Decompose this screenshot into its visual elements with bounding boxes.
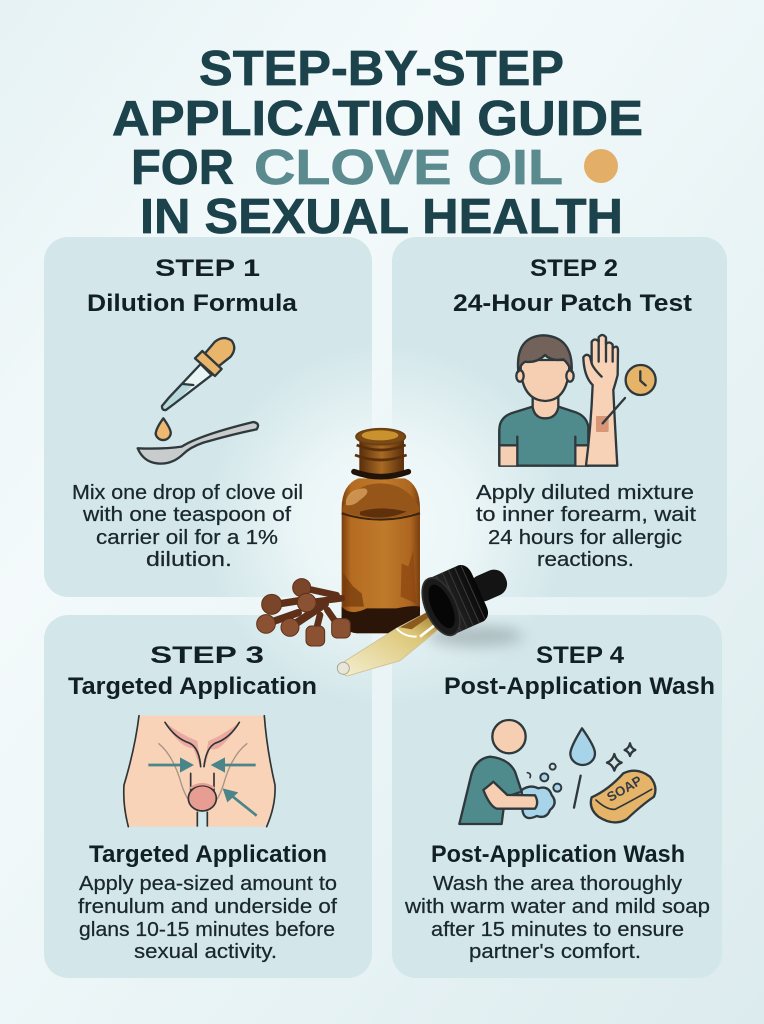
bottle xyxy=(257,429,518,676)
step 3 heading: STEP 3 xyxy=(150,642,264,669)
dropper pipette xyxy=(337,612,440,676)
step 3 title: Targeted Application xyxy=(68,673,317,700)
step 3 text: Apply pea-sized amount to xyxy=(79,872,337,895)
icon: patch test xyxy=(499,335,656,466)
dropper cap xyxy=(415,550,518,641)
arrows xyxy=(148,757,257,816)
icon: hand washing and soap xyxy=(459,720,655,824)
step 3 text: frenulum and underside of xyxy=(78,895,337,918)
step 1 text: carrier oil for a 1% xyxy=(96,526,278,549)
step 1 text: Mix one drop of clove oil xyxy=(72,481,303,504)
step 2 text: Apply diluted mixture xyxy=(476,481,694,504)
step 3 subheading: Targeted Application xyxy=(89,841,327,868)
step 4 text: partner's comfort. xyxy=(469,940,641,963)
title: APPLICATION GUIDE xyxy=(112,92,643,146)
step 1 heading: STEP 1 xyxy=(155,255,260,282)
step 2 text: to inner forearm, wait xyxy=(476,503,696,526)
panel: step 4 xyxy=(392,615,722,978)
cloves xyxy=(257,579,350,646)
step 2 text xyxy=(476,481,696,571)
step 1 text: with one teaspoon of xyxy=(82,503,291,526)
step 4 text: Wash the area thoroughly xyxy=(433,872,683,895)
panel: step 2 xyxy=(392,237,727,597)
panel: step 3 xyxy=(44,615,372,978)
step 3 text: glans 10-15 minutes before xyxy=(79,918,335,941)
step 4 title: Post-Application Wash xyxy=(444,673,715,700)
shadow xyxy=(427,625,523,647)
step 4 text xyxy=(404,872,710,963)
step 1 text: dilution. xyxy=(146,548,232,571)
step 2 title: 24-Hour Patch Test xyxy=(453,290,692,317)
step 2 heading: STEP 2 xyxy=(530,255,618,282)
icon: schematic application diagram xyxy=(123,716,275,827)
step 1 title: Dilution Formula xyxy=(87,290,297,317)
title: STEP-BY-STEP xyxy=(199,42,564,96)
step 3 text: sexual activity. xyxy=(134,940,277,963)
step 2 text: 24 hours for allergic xyxy=(488,526,682,549)
step 4 text: after 15 minutes to ensure xyxy=(431,918,684,941)
panel: step 1 xyxy=(44,237,372,597)
title: CLOVE OIL xyxy=(254,141,563,195)
title: FOR xyxy=(131,141,234,195)
clove oil bottle and dropper photo xyxy=(257,429,523,676)
step 1 text xyxy=(72,481,303,571)
title: IN SEXUAL HEALTH xyxy=(140,190,623,244)
icon: dropper and spoon xyxy=(138,338,258,464)
step 4 heading: STEP 4 xyxy=(536,642,624,669)
step 2 text: reactions. xyxy=(537,548,634,571)
title xyxy=(112,42,643,244)
step 4 text: with warm water and mild soap xyxy=(404,895,710,918)
icon: hand washing and soap: SOAP xyxy=(604,773,645,805)
step 3 text xyxy=(78,872,337,963)
step 4 subheading: Post-Application Wash xyxy=(431,841,685,868)
